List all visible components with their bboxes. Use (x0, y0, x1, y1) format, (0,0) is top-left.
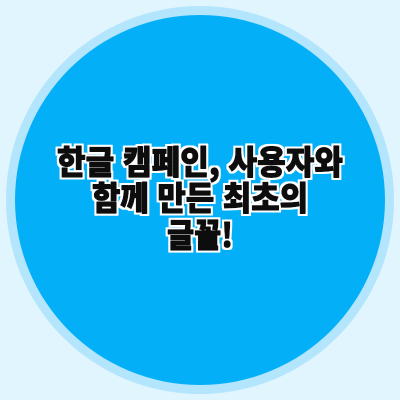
title: 함께 만든 최초의 (92, 172, 308, 220)
title: 한글 캠페인, 사용자와 (57, 136, 343, 184)
title: 글꼴! (167, 209, 233, 257)
title (57, 136, 343, 257)
